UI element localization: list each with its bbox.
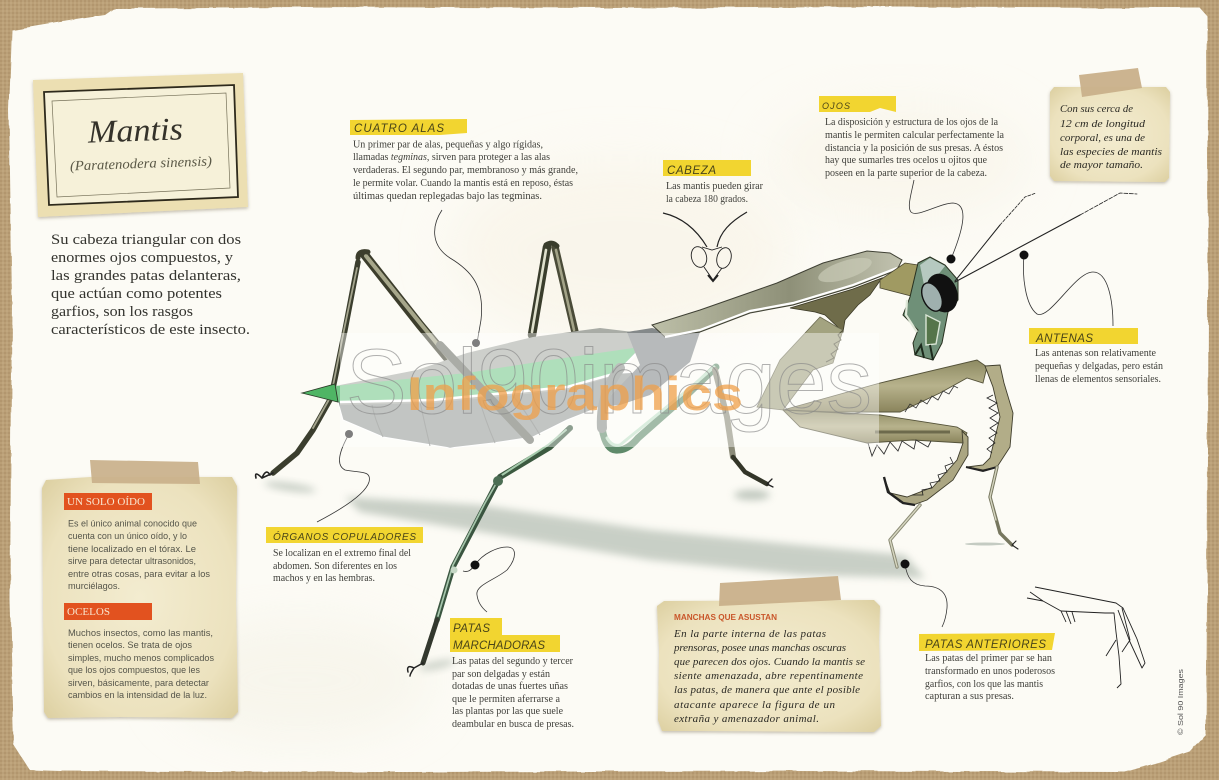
text: ocelos [68,628,214,701]
connector: antenas [1020,250,1113,326]
icon: foreleg line drawing [1027,587,1145,688]
text: patas marchadoras: que le permiten aferrarse a [452,694,561,705]
connector: cuatro alas [435,210,482,347]
intro text: enormes ojos compuestos, y [51,250,234,266]
text: órganos copuladores: machos y en las hembras. [273,573,375,584]
label: patas marchadoras [450,618,574,730]
label: ojos [819,96,1005,179]
text: ocelos: cambios en la intensidad de la luz. [68,690,207,701]
text: patas anteriores: garfios, con los que las mantis [925,679,1043,690]
connector: patas marchadoras [463,547,514,612]
middle leg: green joint [602,367,716,450]
text: patas anteriores: Las patas del primer par se han [925,653,1052,664]
text: órganos copuladores: abdomen. Son diferentes en los [273,561,397,572]
connector: órganos copuladores [317,430,369,522]
text: ocelos: simples, mucho menos complicados [68,653,214,664]
text: ocelos: tienen ocelos. Se trata de ojos [68,640,192,651]
text: patas marchadoras: par son delgadas y están [452,669,550,680]
text: patas marchadoras: deambular en busca de presas. [452,719,574,730]
mantis illustration [256,193,1137,676]
label: órganos copuladores [266,527,423,584]
handwritten note: 12 cm de longitud [1060,118,1146,130]
text: ocelos: sirven, básicamente, para detectar [68,678,209,689]
text: patas anteriores: transformado en unos poderosos [925,666,1055,677]
handwritten note: de mayor tamaño. [1060,159,1143,171]
wing [340,328,645,405]
middle leg: lower [408,428,570,676]
label: cabeza [663,160,764,205]
handwritten note: corporal, es una de [1060,132,1145,144]
text: órganos copuladores: Se localizan en el extremo final del [273,548,411,559]
text: cuatro alas: le permite volar. Cuando la mantis está en reposo, éstas [353,178,573,189]
text: un solo oído: Es el único animal conocido que [68,518,197,530]
label: patas anteriores: PATAS ANTERIORES [925,639,1046,651]
connector: ojos [909,180,963,264]
text: patas marchadoras: dotadas de unas fuertes uñas [452,681,568,692]
scientific name: (Paratenodera sinensis) [70,154,213,174]
text: ojos: hay que sumarles tres ocelos u ojitos que [825,155,988,166]
head [903,257,963,360]
text: ojos: La disposición y estructura de los ojos de la [825,117,999,128]
text: ojos: poseen en la parte superior de la cabeza. [825,168,987,179]
intro text: las grandes patas delanteras, [51,268,241,284]
intro text: que actúan como potentes [51,286,222,302]
text: cuatro alas: últimas quedan replegadas bajo las tegminas. [353,191,542,202]
text: órganos copuladores [273,548,411,584]
handwritten note: Con sus cerca de [1060,103,1133,115]
text: patas marchadoras [452,656,574,730]
icon: mantis head [663,212,747,281]
text: ocelos: que los ojos compuestos, que les [68,665,200,676]
handwritten text: las patas, de manera que ante el posible [674,684,860,696]
heading: un solo oído [64,493,152,510]
antennae [955,193,1137,282]
note card: manchas que asustan [657,576,881,732]
prothorax underside [790,278,882,332]
front coxa [757,317,843,410]
rear leg 2 [532,243,575,335]
tape [1079,68,1142,97]
text: cuatro alas [353,140,578,202]
text: un solo oído [68,518,210,592]
handwritten text: que parecen dos ojos. Cuando la mantis se [674,656,865,668]
label: cuatro alas: CUATRO ALAS [354,123,444,135]
left note card [42,460,238,718]
text: cuatro alas: Un primer par de alas, pequeñas y algo rígidas, [353,140,543,150]
text: cabeza: la cabeza 180 grados. [666,194,748,205]
heading: ocelos [64,603,152,620]
abdomen [338,372,640,448]
label: cabeza: CABEZA [667,165,716,177]
intro text: Su cabeza triangular con dos [51,232,241,248]
label: patas marchadoras: MARCHADORAS [453,640,545,652]
handwritten text: En la parte interna de las patas [673,628,826,640]
label: ojos: OJOS [822,101,850,111]
handwritten text: siente amenazada, abre repentinamente [674,670,863,682]
intro text: garfios, son los rasgos [51,304,193,320]
intro text [51,232,250,338]
text: antenas: Las antenas son relativamente [1035,348,1157,359]
text: un solo oído: murciélagos. [68,581,120,592]
text: ojos: mantis le permiten calcular perfectamente la [825,130,1005,141]
text: cabeza [666,181,764,205]
text: ocelos: Muchos insectos, como las mantis, [68,628,213,639]
text: antenas [1035,348,1163,385]
ground shadows [264,479,1005,673]
title card [33,73,248,217]
label: patas anteriores [919,633,1055,702]
wing green band [335,347,640,402]
label: cuatro alas [350,119,578,202]
text: patas anteriores: capturan a sus presas. [925,691,1014,702]
far middle leg [715,370,773,487]
title text: Mantis [86,110,183,150]
text: patas anteriores [925,653,1055,702]
handwritten text: extraña y amenazador animal. [674,713,819,725]
text: ojos: distancia y la posición de sus presas. A éstos [825,143,1003,154]
intro text: característicos de este insecto. [51,322,250,338]
watermark: Sol90images: Sol90images [346,331,872,433]
text: patas marchadoras: Las patas del segundo y tercer [452,656,574,667]
label: órganos copuladores: ÓRGANOS COPULADORES [273,530,416,543]
watermark: Infographics: Infographics [407,367,743,420]
heading: MANCHAS QUE ASUSTAN [674,612,777,622]
rear femur over wing [440,345,530,440]
watermark [340,331,879,447]
thorax [600,328,700,407]
text: un solo oído: tiene localizado en el tórax. Le [68,544,196,555]
handwritten text: atacante aparece la figura de un [674,699,836,711]
text: antenas: pequeñas y delgadas, pero están [1035,361,1163,372]
front feet [890,467,1018,567]
text: antenas: llenas de elementos sensoriales. [1035,374,1161,385]
tape [90,460,200,484]
neck [880,263,918,297]
text: ojos [825,117,1005,179]
text: cabeza: Las mantis pueden girar [666,181,764,192]
near tibia [884,431,968,505]
handwritten text [673,628,865,725]
text: un solo oído: sirve para detectar ultrasonidos, [68,556,196,567]
text: cuatro alas: llamadas tegminas, sirven para proteger a las alas [353,152,550,163]
heading: ocelos: OCELOS [67,607,110,618]
text: un solo oído: entre otras cosas, para evitar a los [68,569,210,580]
label: antenas [1029,328,1163,385]
far raptorial leg [783,360,1013,471]
near raptorial leg [783,410,968,505]
note card: size [1050,68,1170,182]
far tibia [967,365,1013,470]
pronotum [652,251,902,337]
handwritten note [1060,103,1162,171]
handwritten note: las especies de mantis [1060,146,1162,158]
handwritten text: prensoras, posee unas manchas oscuras [673,642,846,654]
wing tip [302,384,338,402]
tape [719,576,841,606]
text: un solo oído: cuenta con un único oído, y lo [68,531,187,542]
label: patas marchadoras: PATAS [453,623,490,635]
label: antenas: ANTENAS [1035,333,1093,345]
text: cuatro alas: verdaderas. El segundo par, membranoso y más grande, [353,165,578,176]
copyright: © Sol 90 Images [1177,668,1185,735]
heading: un solo oído: UN SOLO OÍDO [67,496,145,508]
connector: patas anteriores [900,560,947,627]
text: patas marchadoras: las plantas por las que suele [452,706,564,717]
rear leg 1 [256,252,495,478]
